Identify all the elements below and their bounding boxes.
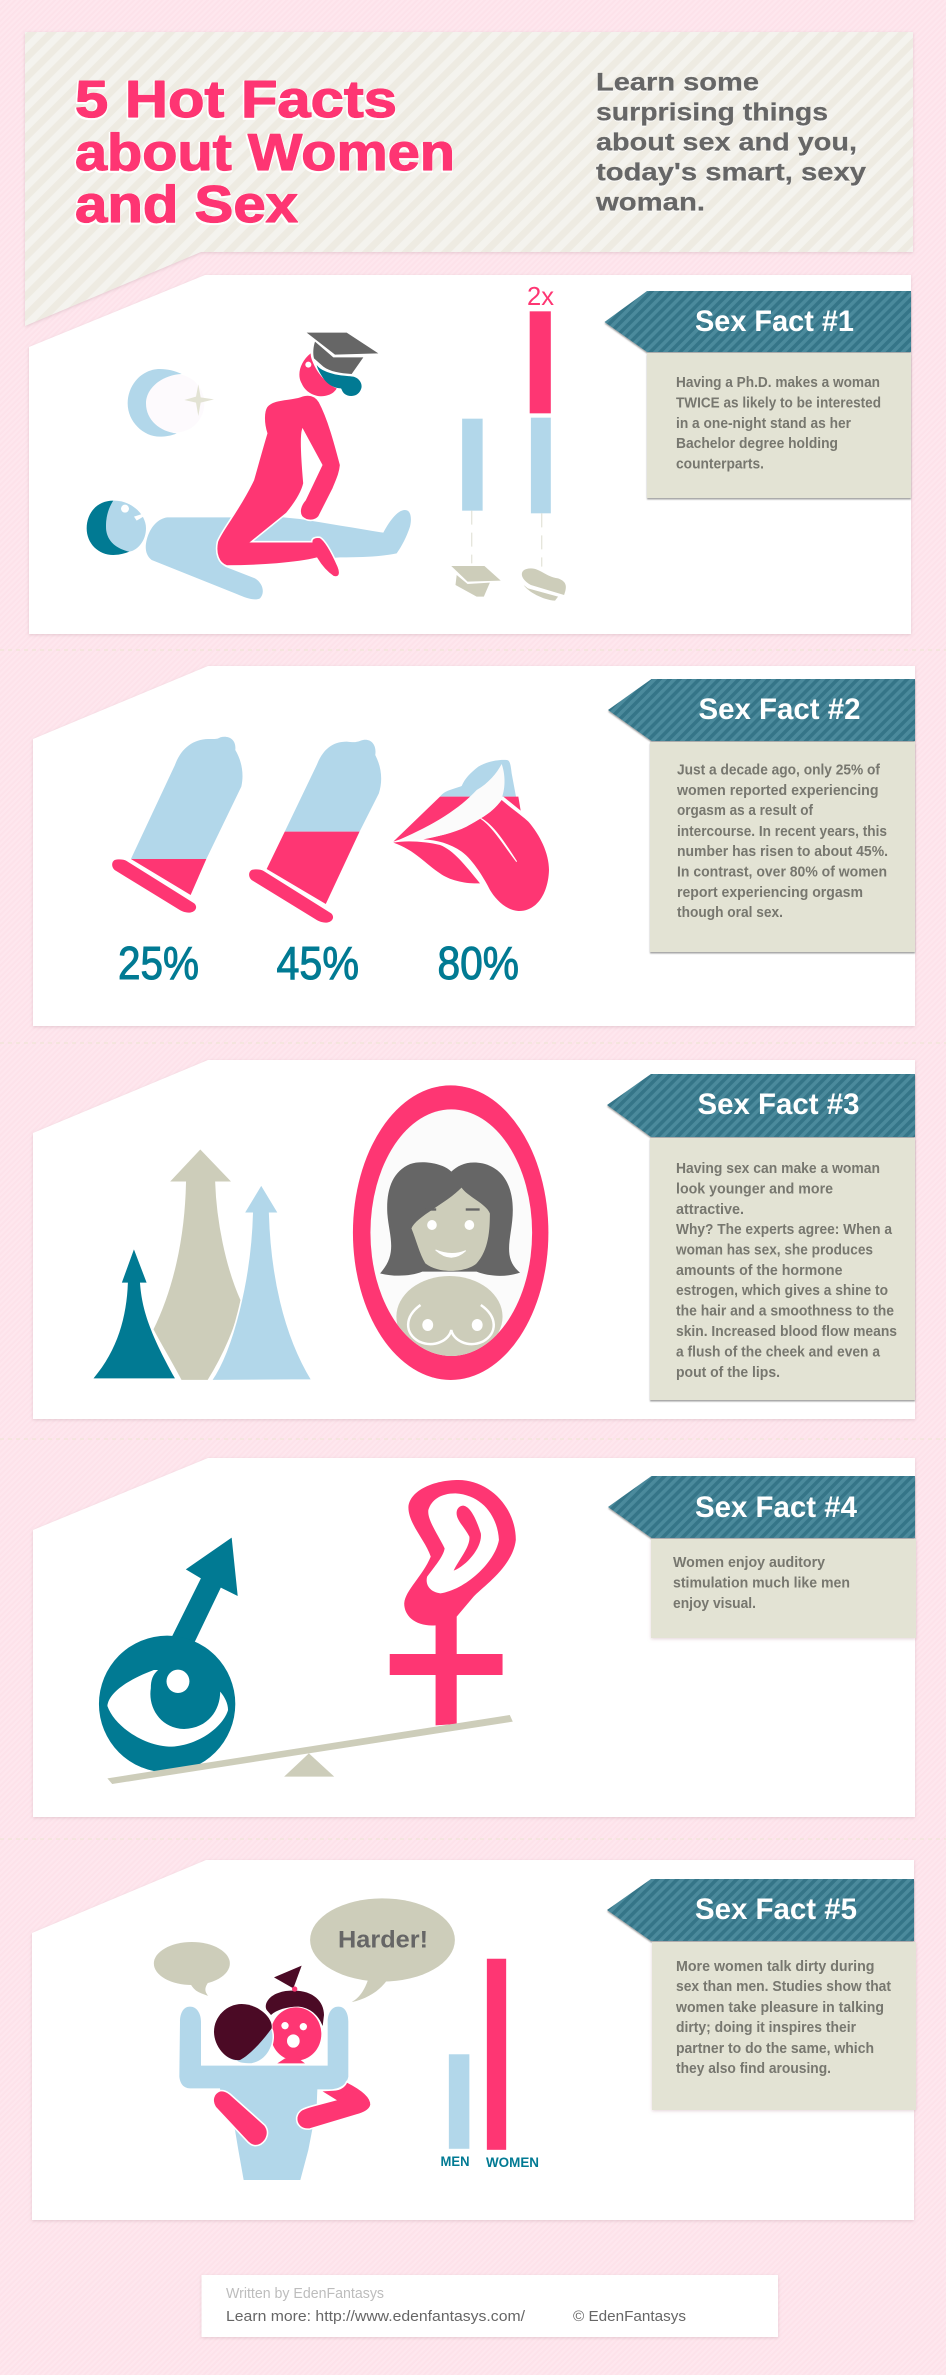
tongue 80%: [393, 760, 549, 911]
bar: bachelor degree: [451, 419, 501, 597]
icon: crescent moon: [128, 369, 214, 437]
label: 2x: 2x: [527, 281, 554, 311]
ribbon heading: [608, 1476, 915, 1538]
ribbon heading: Sex Fact #3: [698, 1088, 860, 1121]
header banner: [25, 32, 913, 326]
title: 5 Hot Facts: [75, 71, 397, 129]
man lying down: [87, 501, 411, 599]
fact text box: Why? The experts agree: When a: [676, 1222, 893, 1238]
fact text box: a flush of the cheek and even a: [676, 1344, 881, 1360]
title: [75, 71, 455, 234]
male symbol with eye: [99, 1538, 238, 1772]
panel background: [33, 1458, 915, 1817]
panel: sex fact 4: [33, 1458, 916, 1817]
fact text box: In contrast, over 80% of women: [677, 864, 887, 880]
ribbon heading: Sex Fact #1: [695, 305, 854, 338]
ribbon heading: [607, 1879, 914, 1941]
ribbon heading: Sex Fact #2: [698, 693, 860, 726]
bar chart: [449, 1959, 506, 2150]
fact text box: sex than men. Studies show that: [676, 1979, 891, 1995]
footer credits: [202, 2275, 778, 2337]
fact text box: report experiencing orgasm: [677, 885, 863, 901]
fact text box: pout of the lips.: [676, 1365, 780, 1381]
fact text box: women take pleasure in talking: [675, 2000, 884, 2016]
bar labels: WOMEN: [486, 2154, 539, 2170]
fact text box: intercourse. In recent years, this: [677, 824, 887, 840]
fact text box: [652, 1942, 916, 2110]
bar: Ph.D. twice as likely: [522, 311, 566, 601]
panel: sex fact 3: [33, 1060, 915, 1419]
panel: sex fact 1: [29, 275, 911, 634]
seesaw: [107, 1715, 513, 1784]
fact text box: amounts of the hormone: [676, 1263, 842, 1279]
fact text box: [650, 742, 915, 952]
fact text box: TWICE as likely to be interested: [676, 396, 881, 412]
copyright: © EdenFantasys: [573, 2308, 686, 2325]
illustration: arrows and mirror: [94, 1085, 548, 1381]
fact text box: counterparts.: [676, 456, 764, 472]
fact text box: More women talk dirty during: [676, 1959, 874, 1975]
panel background: [33, 666, 915, 1026]
couple figure: [179, 1966, 371, 2180]
speech bubble: small: [154, 1942, 230, 1996]
fact text box: stimulation much like men: [673, 1576, 850, 1592]
woman kneeling: [217, 395, 341, 577]
footer panel: [202, 2275, 778, 2337]
speech bubbles and bar chart: [154, 1898, 506, 2150]
bar labels: [440, 2153, 539, 2170]
panel background: [33, 1060, 915, 1419]
percentages: 80%: [438, 937, 519, 989]
intro text: Learn some: [596, 68, 759, 96]
fact text box: the hair and a smoothness to the: [676, 1304, 894, 1320]
woman's head with graduation cap: [299, 333, 378, 396]
fact text box: [647, 353, 911, 498]
speech text: Harder!: [338, 1926, 428, 1954]
fact text box: dirty; doing it inspires their: [676, 2020, 856, 2036]
ribbon heading: Sex Fact #5: [695, 1893, 857, 1926]
mirror with woman: [353, 1085, 548, 1380]
panel: sex fact 5: [32, 1860, 916, 2220]
intro text: [595, 68, 866, 216]
fact text box: estrogen, which gives a shine to: [676, 1283, 888, 1299]
title: and Sex: [75, 176, 298, 234]
fact text box: Just a decade ago, only 25% of: [677, 762, 880, 778]
fact text box: [650, 1138, 915, 1400]
fact text box: Bachelor degree holding: [676, 436, 838, 452]
speech bubble: large: [310, 1898, 455, 2002]
banner shape: [25, 32, 913, 326]
fact text box: attractive.: [676, 1202, 744, 1218]
woman limbs: [213, 2082, 371, 2146]
condom 25%: [112, 737, 243, 913]
female symbol with ear: [390, 1480, 516, 1725]
fact text box: partner to do the same, which: [676, 2041, 874, 2057]
intro text: woman.: [595, 188, 705, 216]
panel background: [32, 1860, 914, 2220]
fact text box: orgasm as a result of: [677, 803, 813, 819]
fact text box: number has risen to about 45%.: [677, 844, 888, 860]
ribbon heading: [607, 1074, 915, 1137]
ribbon heading: [604, 291, 911, 352]
percentages: 45%: [276, 937, 359, 989]
ribbon heading: Sex Fact #4: [695, 1491, 857, 1524]
illustration: condoms: [112, 737, 381, 923]
fact text box: [651, 1539, 916, 1638]
fact text box: Having a Ph.D. makes a woman: [676, 375, 880, 391]
bar labels: MEN: [440, 2153, 470, 2169]
fact text box: Having sex can make a woman: [676, 1161, 880, 1177]
written by: Written by EdenFantasys: [226, 2286, 384, 2302]
intro text: about sex and you,: [596, 128, 857, 156]
intro text: today's smart, sexy: [596, 158, 866, 186]
condom 45%: [249, 740, 381, 923]
percentages: [118, 937, 519, 989]
illustration: eye and ear on a seesaw: [99, 1480, 516, 1784]
arrows: [94, 1148, 312, 1381]
fact text box: in a one-night stand as her: [676, 416, 851, 432]
fact text box: enjoy visual.: [673, 1596, 756, 1612]
man figure: [179, 2004, 348, 2180]
panel background: [29, 275, 911, 634]
learn more link: Learn more: http://www.edenfantasys.com/: [226, 2308, 526, 2325]
ribbon heading: [608, 679, 915, 741]
percentages: 25%: [118, 937, 199, 989]
fact text box: Women enjoy auditory: [673, 1555, 825, 1571]
panel: sex fact 2: [33, 666, 915, 1026]
fact text box: women reported experiencing: [676, 783, 878, 799]
fact text box: though oral sex.: [677, 905, 783, 921]
illustration: couple with moon: [87, 369, 411, 599]
fact text box: they also find arousing.: [676, 2061, 831, 2077]
title: about Women: [75, 124, 455, 182]
woman head: [266, 1966, 324, 2063]
fact text box: look younger and more: [676, 1182, 833, 1198]
fact text box: skin. Increased blood flow means: [676, 1324, 897, 1340]
fact text box: woman has sex, she produces: [675, 1242, 873, 1258]
intro text: surprising things: [596, 98, 828, 126]
